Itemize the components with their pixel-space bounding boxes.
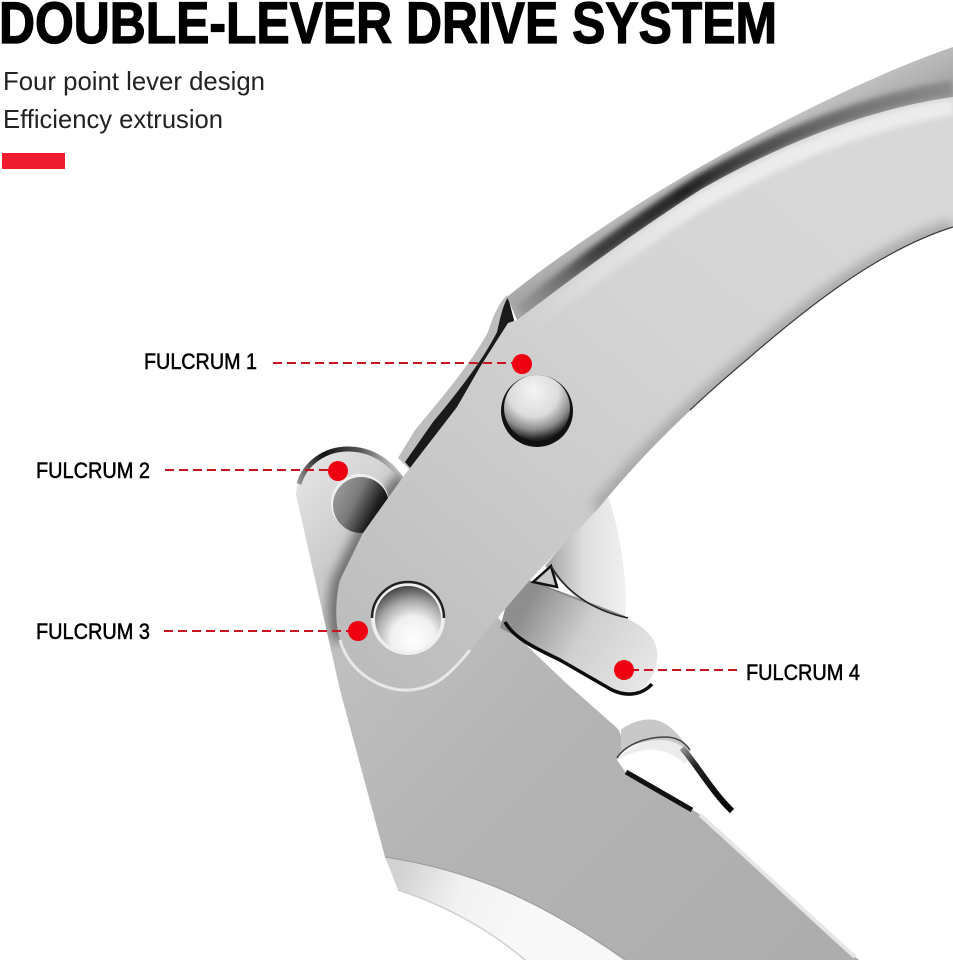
lower jaw [296,447,859,960]
small lever: fulcrum 4 arm [500,566,657,694]
spring [617,719,732,811]
rivet: fulcrum 1 [501,375,573,447]
subtitle line 1: Four point lever design [3,66,265,96]
callout: fulcrum 4: FULCRUM 4 [746,660,860,685]
callout: fulcrum 2 [36,458,348,483]
callout: fulcrum 3: FULCRUM 3 [36,619,150,644]
rivet: fulcrum 3 [371,581,445,655]
callout: fulcrum 1: FULCRUM 1 [144,349,257,374]
red accent bar [2,153,65,169]
rivet: fulcrum 2 [331,474,389,533]
callout: fulcrum 2: FULCRUM 2 [36,458,150,483]
callout: fulcrum 1 [144,349,532,374]
back wedge behind lever [545,493,626,618]
handle shoulder and dark slit [398,295,514,470]
callout: fulcrum 4 [614,660,860,685]
subtitle line 2: Efficiency extrusion [3,104,223,134]
upper handle and link plate [336,47,953,690]
callout: fulcrum 3 [36,619,368,644]
